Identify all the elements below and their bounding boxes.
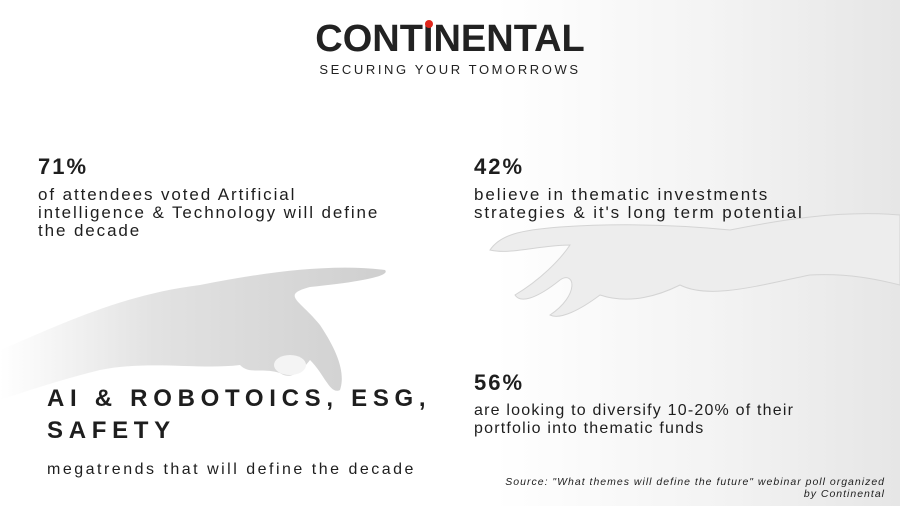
logo: SECURING YOUR TOMORROWS [319,62,581,77]
source note [505,476,885,500]
stat: 42% [474,154,804,222]
stat: 56%: are looking to diversify 10-20% of their [474,402,794,419]
stat: 42%: believe in thematic investments [474,185,769,204]
illustration: human hand [43,268,386,391]
source note: by Continental [804,488,885,500]
megatrends heading: megatrends that will define the decade [47,461,416,478]
stat: 56%: portfolio into thematic funds [474,420,704,437]
stat: 71%: of attendees voted Artificial [38,185,296,204]
stat: 71%: intelligence & Technology will define [38,203,379,222]
illustration: robot hand [489,213,900,317]
stat: 71%: the decade [38,221,141,240]
stat: 56% [474,370,794,437]
megatrends heading: SAFETY [47,417,176,444]
stat: 42%: 42% [474,154,524,179]
stat: 71% [38,154,379,240]
megatrends heading [47,385,431,478]
logo: CONTINENTAL [315,18,585,60]
stat: 56%: 56% [474,370,524,395]
stat: 71%: 71% [38,154,88,179]
megatrends heading: AI & ROBOTOICS, ESG, [47,385,431,412]
stat: 42%: strategies & it's long term potential [474,203,804,222]
source note: Source: "What themes will define the future" webinar poll organized [505,476,885,488]
